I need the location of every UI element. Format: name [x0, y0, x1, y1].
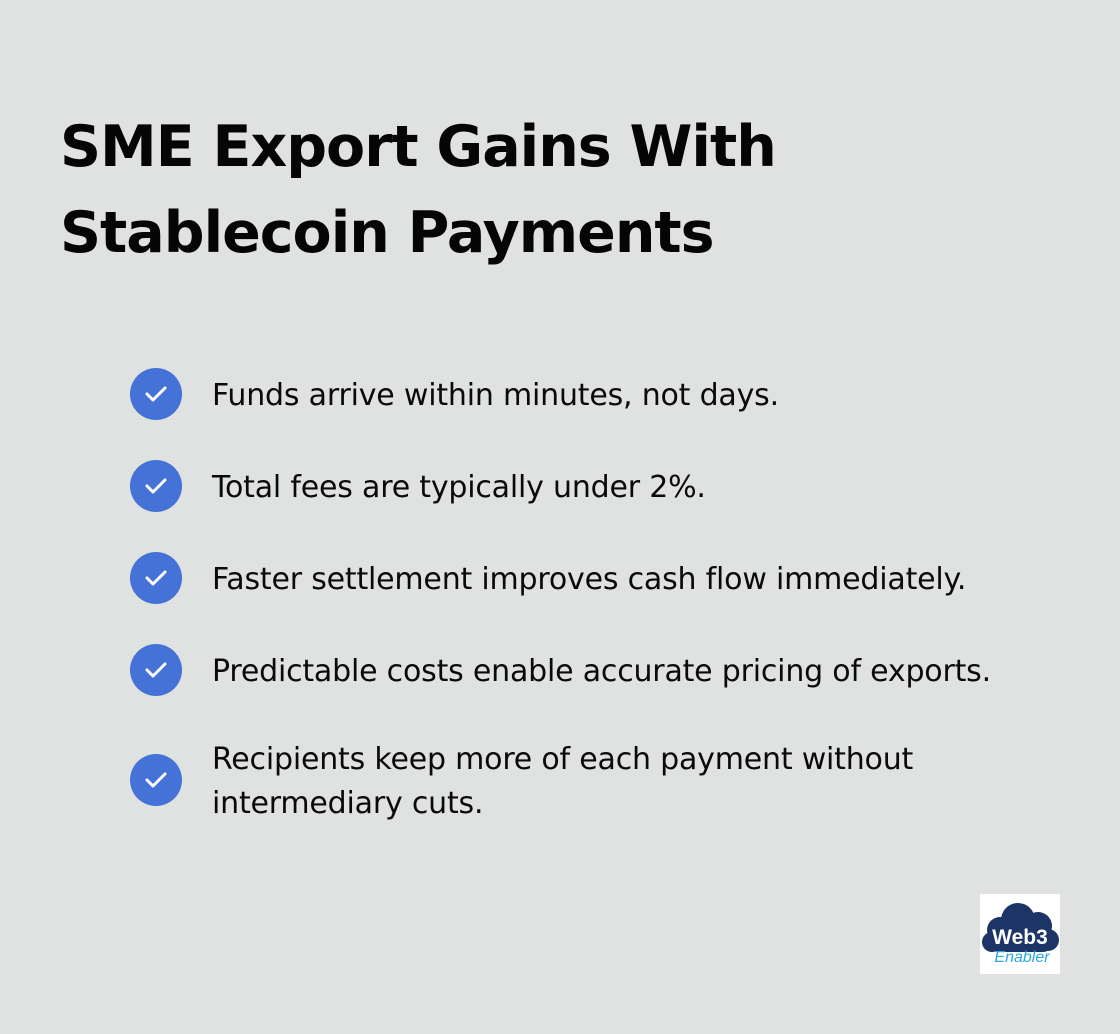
item 3: Faster settlement improves cash flow immediately. — [212, 562, 966, 597]
item 5: Recipients keep more of each payment without intermediary cuts. — [212, 742, 913, 821]
item 2: Total fees are typically under 2%. — [212, 470, 706, 505]
title: SME Export Gains With — [60, 114, 776, 180]
item 2 — [130, 460, 706, 512]
item 4 — [130, 644, 991, 696]
logo: Web3 — [992, 926, 1048, 949]
logo: Enabler — [994, 949, 1050, 966]
item 4: Predictable costs enable accurate pricing of exports. — [212, 654, 991, 689]
item 1: Funds arrive within minutes, not days. — [212, 378, 779, 413]
title: Stablecoin Payments — [60, 200, 714, 266]
title — [60, 114, 776, 266]
item 1 — [130, 368, 779, 420]
item 3 — [130, 552, 966, 604]
logo — [980, 894, 1060, 974]
